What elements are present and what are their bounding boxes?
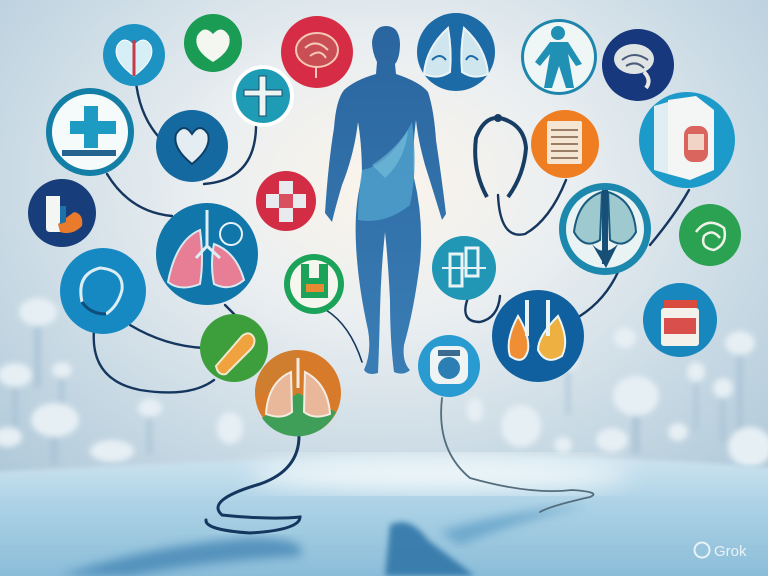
icon: teal cross vial — [432, 236, 496, 300]
icon: red plaster cross — [256, 171, 316, 231]
icon: stethoscope on blue — [60, 248, 146, 334]
icon: walking person — [521, 19, 597, 95]
icon: lungs large — [156, 203, 258, 305]
icon: heart stethoscope — [103, 24, 165, 86]
icon: green knot — [679, 204, 741, 266]
icon: navy heart — [156, 110, 228, 182]
watermark — [694, 542, 747, 560]
icon: green capsule — [200, 314, 268, 382]
icon: pill on navy — [28, 179, 96, 247]
icon: medical jacket — [639, 92, 735, 188]
icon: multicolour lungs — [255, 350, 341, 436]
icon: gauge monitor — [418, 335, 480, 397]
icon: green apple heart — [184, 14, 242, 72]
icon: teal cross — [232, 65, 294, 127]
icon: orange document — [531, 110, 599, 178]
icon: brain on navy — [602, 29, 674, 101]
icon: anatomy on teal — [559, 183, 651, 275]
connector cables — [94, 70, 689, 533]
human figure — [325, 26, 446, 374]
icon: lungs outline — [417, 13, 495, 91]
blurred background mushrooms — [0, 298, 768, 467]
icon: medical cross badge — [46, 88, 134, 176]
icon: green shield — [284, 254, 344, 314]
floor — [0, 456, 768, 576]
icon: red brain — [281, 16, 353, 88]
icon: medicine bottle — [643, 283, 717, 357]
watermark: Grok — [714, 543, 747, 560]
icon: clipboard stethoscope — [475, 114, 526, 197]
icon: kidneys — [492, 290, 584, 382]
